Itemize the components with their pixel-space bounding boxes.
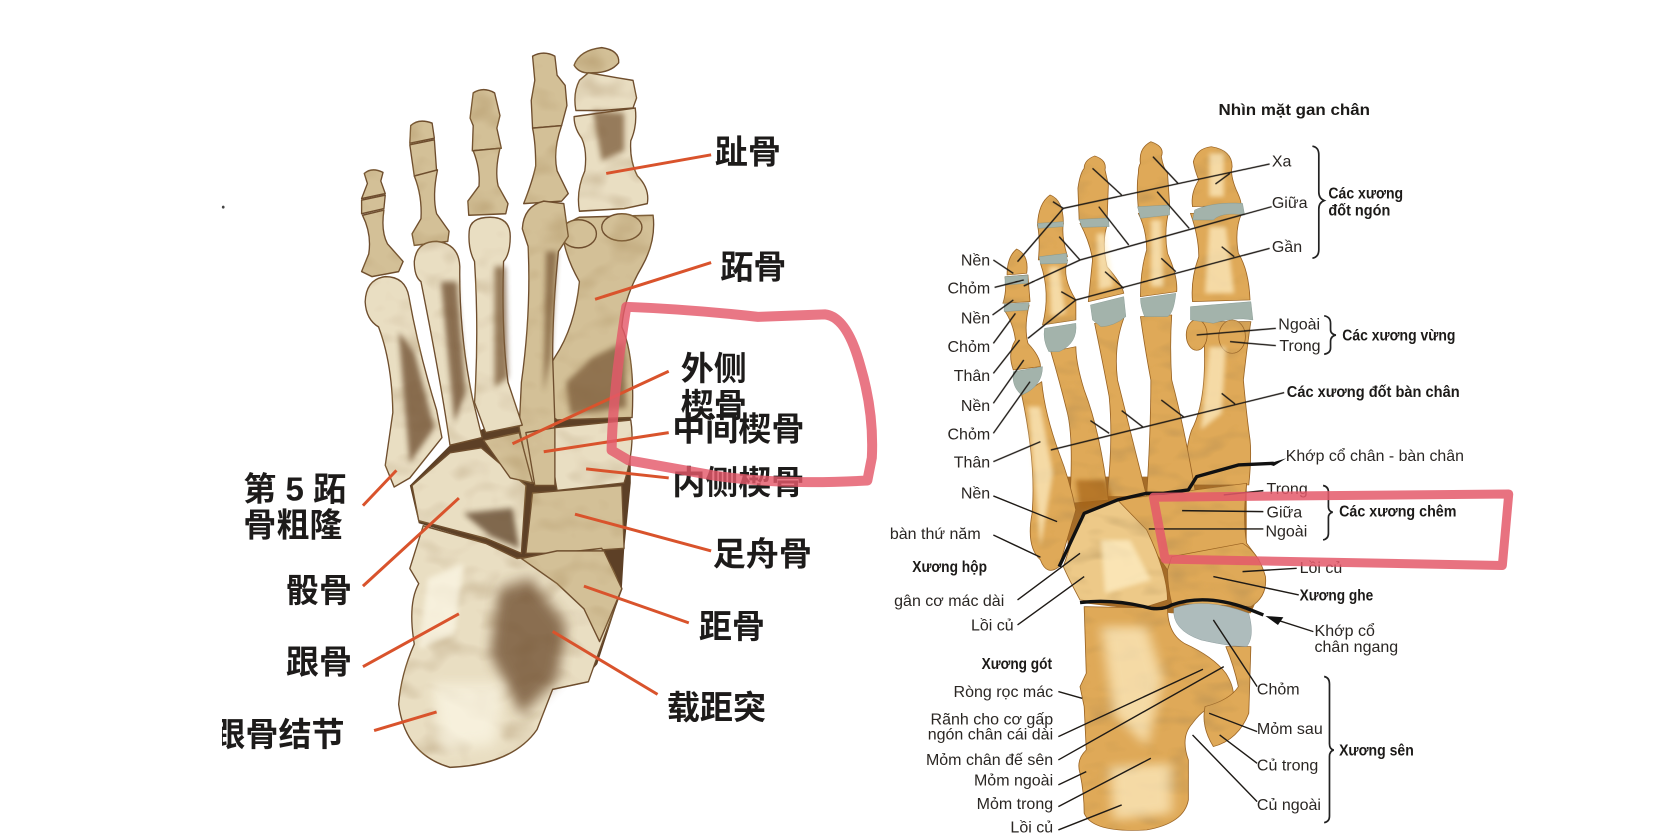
toe 4 xyxy=(1038,195,1063,225)
right foot labels: Giữa xyxy=(1267,504,1302,521)
left labels: 中间楔骨 xyxy=(672,412,804,449)
red highlight outline: right xyxy=(1153,494,1509,566)
left labels: 趾骨 xyxy=(715,134,781,171)
joint arrows xyxy=(1265,458,1286,625)
right foot labels: Ngoài xyxy=(1278,317,1320,334)
lateral cuneiform xyxy=(483,433,533,483)
right foot labels: ngón chân cái dài xyxy=(928,726,1053,743)
navicular xyxy=(526,485,624,553)
left labels: 骨粗隆 xyxy=(243,508,342,545)
talus body xyxy=(1204,647,1251,747)
right foot labels: Khớp cổ xyxy=(1315,622,1375,640)
left labels: 距骨 xyxy=(699,609,765,646)
right foot labels: Củ trong xyxy=(1257,757,1318,774)
left label: calcaneal tuberosity, cropped at the image edge: 跟骨结节 xyxy=(212,717,345,754)
left labels: 第 5 跖 xyxy=(243,471,346,508)
right foot labels: Thân xyxy=(954,454,990,471)
right foot labels: Xương gót xyxy=(982,656,1052,673)
transverse tarsal joint line xyxy=(1080,600,1263,615)
right foot labels: Lồi củ xyxy=(1300,560,1342,577)
right foot labels: Các xương chêm xyxy=(1339,503,1456,520)
right foot labels: bàn thứ năm xyxy=(890,526,981,543)
left labels xyxy=(243,134,812,727)
toe 2 xyxy=(1137,142,1170,208)
cuneiforms xyxy=(1118,483,1259,570)
cuboid xyxy=(412,448,526,553)
right foot labels: Khớp cổ chân - bàn chân xyxy=(1286,447,1464,465)
right foot labels: Xương hộp xyxy=(912,559,987,576)
toe 5 xyxy=(362,170,385,199)
talus sliver xyxy=(521,551,622,642)
right foot labels: Mỏm ngoài xyxy=(974,772,1053,789)
toe 5 xyxy=(1007,249,1027,275)
right foot labels: Ngoài xyxy=(1265,524,1307,541)
right foot diagram panel xyxy=(890,102,1509,836)
left foot bones illustration xyxy=(222,48,654,767)
left labels: 跟骨 xyxy=(286,644,352,681)
right foot labels: Gần xyxy=(1272,239,1302,256)
right foot labels: Trong xyxy=(1279,338,1321,355)
right foot labels: Nền xyxy=(961,310,990,327)
left labels: 骰骨 xyxy=(286,573,352,610)
curly brackets xyxy=(1312,146,1336,823)
right foot bones illustration xyxy=(1003,142,1266,830)
right foot labels: Nền xyxy=(961,253,990,270)
left labels: 足舟骨 xyxy=(713,537,812,574)
dark underlay xyxy=(1068,477,1265,613)
right foot labels: Xa xyxy=(1272,153,1292,170)
toe 3 xyxy=(1078,156,1108,220)
right foot labels: đốt ngón xyxy=(1328,203,1390,220)
right leader lines and joint lines xyxy=(993,157,1313,830)
right foot labels: Giữa xyxy=(1272,195,1308,212)
right foot labels: Lồi củ xyxy=(971,618,1014,635)
right foot labels: Xương ghe xyxy=(1300,588,1374,605)
right foot labels: Xương sên xyxy=(1339,742,1414,759)
tarsometatarsal joint line xyxy=(1059,463,1274,567)
left labels: 载距突 xyxy=(667,690,766,727)
toe 4 xyxy=(410,121,434,143)
right foot labels: Củ ngoài xyxy=(1257,797,1321,814)
right foot labels: gân cơ mác dài xyxy=(894,593,1004,610)
shading xyxy=(1028,153,1234,820)
right foot labels: Lồi củ xyxy=(1010,819,1053,836)
dark underlay xyxy=(410,418,631,689)
calcaneus xyxy=(1079,607,1233,830)
cuboid xyxy=(1063,500,1168,607)
left labels: 外侧 xyxy=(681,351,747,388)
right foot labels: Chỏm xyxy=(1257,682,1300,699)
left leader lines xyxy=(363,155,711,731)
right foot labels: Chỏm xyxy=(947,427,990,444)
right foot labels: Mỏm chân đế sên xyxy=(926,752,1053,769)
right foot labels: Các xương đốt bàn chân xyxy=(1287,384,1460,401)
right foot labels: Nền xyxy=(961,485,990,502)
calcaneus xyxy=(399,526,622,767)
right foot labels: Mỏm trong xyxy=(977,796,1053,813)
right foot labels: Trong xyxy=(1267,481,1308,498)
toe 1 xyxy=(1192,147,1241,207)
red highlight outline: left xyxy=(612,307,872,482)
right foot labels: Nền xyxy=(961,398,990,415)
right foot labels: Chỏm xyxy=(947,280,990,297)
navicular xyxy=(1168,543,1266,607)
left foot diagram panel xyxy=(212,48,872,767)
joint cartilage xyxy=(1004,203,1253,647)
right foot labels: Thân xyxy=(954,368,990,385)
shading overlays xyxy=(399,111,626,750)
right foot labels: Chỏm xyxy=(947,339,990,356)
right foot labels: chân ngang xyxy=(1315,639,1398,656)
intermediate cuneiform xyxy=(526,428,555,485)
right foot labels: Các xương vừng xyxy=(1342,327,1455,344)
left labels: 跖骨 xyxy=(720,249,786,286)
right foot labels: Ròng rọc mác xyxy=(954,684,1053,701)
right foot labels: Rãnh cho cơ gấp xyxy=(931,711,1053,728)
toe 1 xyxy=(574,48,619,73)
right foot labels: Các xương xyxy=(1328,185,1403,202)
right foot labels: Nhìn mặt gan chân xyxy=(1219,102,1370,119)
small speck xyxy=(222,206,225,209)
right foot labels: Mỏm sau xyxy=(1257,721,1323,738)
toe 2 xyxy=(531,53,567,128)
right foot labels xyxy=(890,102,1464,836)
left labels: 楔骨 xyxy=(681,388,747,425)
toe 3 xyxy=(470,90,501,151)
left labels: 内侧楔骨 xyxy=(672,465,804,502)
